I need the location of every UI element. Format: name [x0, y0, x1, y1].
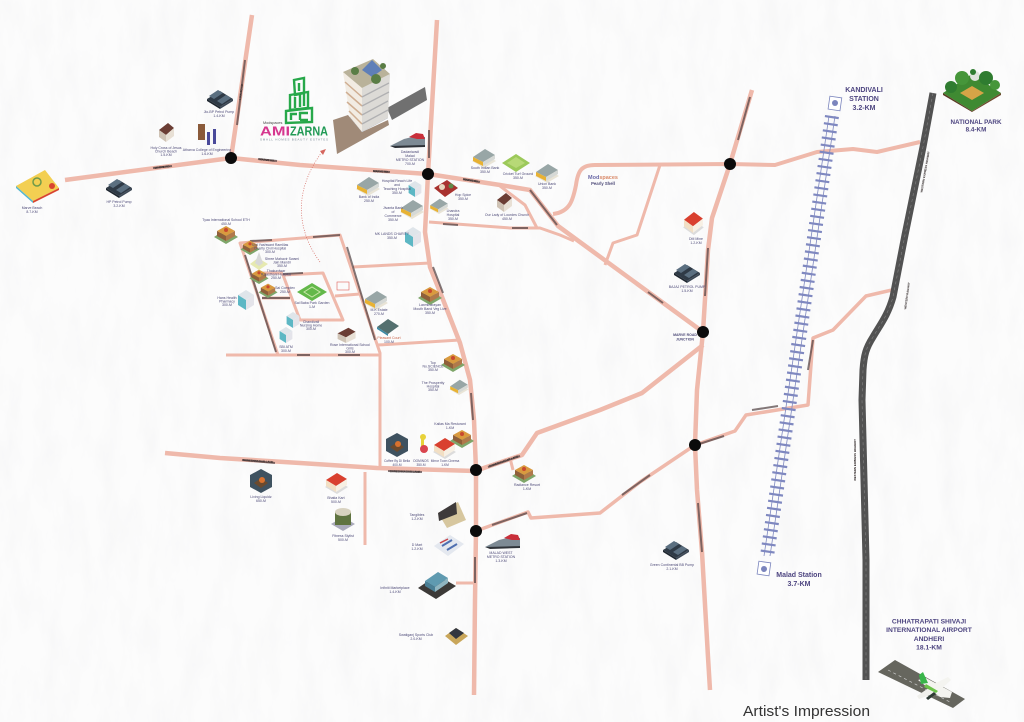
marker: Lhandra Hospital — [429, 199, 460, 221]
Malad station: Malad Station — [776, 572, 822, 579]
marker: Mirror Town Cinema: Mirror Town Cinema — [431, 459, 459, 463]
marker: Hans Health: Hans Health — [217, 296, 237, 300]
metro branch road — [476, 290, 892, 531]
road name markers: GANESHNAGAR LANE — [390, 469, 420, 474]
Airport: 18.1-KM — [916, 644, 942, 652]
marker: Malad metro station: 700-M — [405, 162, 415, 166]
marker: Jio-BP Petrol Pump: 1.4-KM — [213, 114, 225, 118]
marker: Green Continental pump: Green Continental BB Pump — [650, 563, 694, 567]
icon: green tower mark — [286, 78, 312, 123]
marker: Bhatia Kart: Bhatia Kart — [327, 496, 345, 500]
marker: Infiniti Marketplace: 1.4-KM — [389, 590, 401, 594]
marker: Prosperity Hospital — [422, 380, 469, 395]
marker: Holy Cross church: 1.5-KM — [160, 153, 172, 157]
northern link road — [231, 15, 252, 158]
marker: Bajaj Petrol Pump: 1.5-KM — [681, 289, 693, 293]
marker: Prosperity Hospital: Hospital — [427, 384, 440, 388]
logo: Amizarna: SMALL HOMES BEAUTY ESTATES — [260, 138, 328, 142]
western express highway: WESTERN RAILWAY — [903, 282, 911, 310]
Airport: ANDHERI — [914, 636, 944, 643]
National Park: NATIONAL PARK — [950, 119, 1002, 126]
marker: Our Lady of Lourdes Church: Our Lady of Lourdes Church — [485, 213, 529, 217]
marker: Kailas restaurant: Kailas Ma Resturant — [434, 422, 466, 426]
marker: Sai Baba Park Garden: 1-M — [309, 305, 315, 309]
marker: Malad West metro: MALAD WEST — [489, 551, 513, 555]
marker: Top — [422, 354, 465, 372]
marker: Rose International School — [330, 328, 370, 354]
marker: Atharva College: Atharva College of Engineering — [183, 148, 231, 152]
road name markers: GANESHNAGAR LANE — [243, 458, 274, 464]
project plot outline — [337, 282, 349, 290]
marker: Rose International School: 300-M — [345, 350, 355, 354]
marker: Hospital Reach Life: and — [394, 183, 400, 187]
marker: Jain temple: Shree Mahavir Swami — [265, 257, 299, 261]
marker: Mirror Town Cinema: 1-KM — [441, 463, 449, 467]
Airport — [878, 618, 973, 708]
eastern north south road — [695, 90, 752, 690]
western express highway: WESTERN EXPRESS HIGHWAY — [919, 151, 931, 193]
marker: Yashwant hospital — [240, 241, 289, 255]
marker: DM Mine — [683, 212, 704, 245]
marker: Atharva College: 1.6-KM — [201, 152, 213, 156]
marker: Dominos: DOMINOS — [413, 459, 429, 463]
logo: Amizarna: AMI — [260, 124, 290, 138]
marker: Hop Spice: 350-M — [458, 197, 468, 201]
marker: Prosperity Hospital: The Prosperity — [422, 381, 445, 385]
marker: Hop Spice: Hop Spice — [455, 193, 471, 197]
marker: Coffee By Di Bella — [384, 433, 410, 467]
Marve Road west and north — [65, 158, 703, 332]
marker: Chandivali Nursing Home: Chandivali — [303, 320, 319, 324]
marker: Hospital Reach Life — [382, 179, 421, 197]
label: Marve Road Junction — [673, 333, 697, 342]
marker: Jain temple — [250, 252, 299, 270]
marker: Living Liquidz: Living Liquidz — [250, 495, 272, 499]
marker: D Mart: D Mart — [412, 543, 422, 547]
marker: Thakur hospital: Thakurdwar — [267, 269, 286, 273]
marker: Swatiganj Sports Club: 2.0-KM — [410, 637, 422, 641]
project tower — [333, 59, 427, 154]
marker: Rose International School: Rose International School — [330, 343, 370, 347]
marker: Dominos: 350-M — [416, 463, 426, 467]
marker: estate: 270-M — [374, 312, 384, 316]
marker: Hospital Reach Life: Teaching Hospital — [383, 187, 411, 191]
marker: Lhandra Hospital: Lhandra — [447, 209, 459, 213]
west block roads — [240, 235, 380, 470]
Kandivali station: 3.2-KM — [853, 105, 876, 112]
marker: Pleasant Court: Pleasant Court — [377, 336, 401, 340]
marker: Yashwant hospital: 300-M — [265, 250, 275, 254]
marker: Living Liquidz: 650-M — [256, 499, 266, 503]
marker: Green Continental pump: 2.1-KM — [666, 567, 678, 571]
road name markers — [153, 60, 813, 583]
dotted route arrow — [301, 149, 326, 262]
marker: Lhandra Hospital: Hospital — [447, 213, 460, 217]
marker: Chandivali Nursing Home: 300-M — [306, 327, 316, 331]
marker: Yashwant hospital: Shri Yashwant Ramlilas — [252, 243, 289, 247]
marker: Pleasant Court — [377, 319, 401, 344]
western express highway — [853, 93, 933, 680]
junction markers — [225, 152, 736, 537]
Modspaces Pearly Shell — [588, 175, 618, 186]
marker: Lhandra Hospital: 350-M — [448, 217, 458, 221]
Pearly Shell to national park road — [553, 142, 920, 214]
marker: Hans Health: 300-M — [222, 303, 232, 307]
marker: Jio-BP Petrol Pump — [204, 90, 234, 118]
marker: Jain temple: Jain Mandir — [273, 260, 292, 264]
marker: Jain temple: 350-M — [277, 264, 287, 268]
National Park: 8.4-KM — [966, 126, 986, 134]
marker: Bajaj Petrol Pump — [669, 264, 706, 293]
marker: Our Lady of Lourdes Church — [485, 193, 529, 221]
marker: Hospital Reach Life: 350-M — [392, 191, 402, 195]
label: Marve Road Junction: MARVE ROAD — [673, 333, 697, 337]
marker: Yashwant hospital: Charity Civil Hospital — [254, 246, 286, 250]
marker: Marve Beach: 8.7-KM — [26, 210, 38, 214]
marker: Marve Beach: Marve Beach — [22, 206, 42, 210]
marker: HP Petrol Pump: HP Petrol Pump — [106, 200, 132, 204]
marker: South Indian Bank: 350-M — [480, 170, 490, 174]
marker: estate — [364, 291, 388, 316]
marker: SBI ATM: SBI ATM — [279, 345, 293, 349]
marker: Chandivali Nursing Home — [287, 312, 322, 331]
marker: Kailas restaurant: 1-KM — [446, 426, 454, 430]
Artist's Impression caption: Artist's Impression — [743, 703, 870, 720]
road name markers: GANESHNAGAR LANE — [489, 454, 519, 468]
National Park — [943, 69, 1002, 134]
marker: cricket turf: 350-M — [513, 176, 523, 180]
marker: Malad metro station: Dadaniwadi — [401, 150, 419, 154]
marker: international school — [202, 218, 250, 244]
road name markers: MARVE RD. — [463, 177, 479, 184]
marker: Swatiganj Sports Club — [399, 628, 468, 645]
marker: Union Bank: Union Bank — [538, 182, 556, 186]
marker: Malad metro station — [390, 133, 425, 166]
logo: Amizarna: ZARNA — [290, 124, 328, 138]
marker: Kailas restaurant — [434, 422, 474, 448]
marker: D Mart — [411, 535, 464, 556]
marker: Fitness Stylist: Fitness Stylist — [332, 534, 354, 538]
road name markers: MARVE RD. — [259, 157, 275, 163]
marker: Chandivali Nursing Home: Nursing Home — [300, 324, 322, 328]
marker: Laxminarayan: 350-M — [425, 311, 435, 315]
marker: Radiance Resort — [512, 465, 540, 491]
Modspaces Pearly Shell: Pearly Shell — [591, 181, 615, 186]
marker: Sai Complex: 250-M — [280, 290, 290, 294]
logo: Amizarna: Modspaces — [263, 121, 283, 125]
Airport: CHHATRAPATI SHIVAJI — [892, 618, 966, 626]
road name markers: LINK ROAD — [238, 84, 244, 100]
marker: Sai Complex: Sai Complex — [275, 286, 295, 290]
main north south road — [425, 20, 476, 695]
label: Marve Road Junction: JUNCTION — [676, 338, 694, 342]
marker: Radiance Resort: 1-KM — [523, 487, 531, 491]
marker: Sai Baba Park Garden — [294, 283, 330, 309]
icon: runway and plane — [878, 660, 965, 708]
road name markers: MARVE RD. — [154, 164, 171, 170]
marker: estate: M.K Estate — [370, 308, 388, 312]
Kandivali station — [828, 87, 883, 112]
marker: Holy Cross church — [150, 123, 182, 157]
marker: Prosperity Hospital: 350-M — [428, 388, 438, 392]
marker: Our Lady of Lourdes Church: 450-M — [502, 217, 512, 221]
logo: Amizarna — [260, 78, 328, 142]
marker: Fitness Stylist — [331, 508, 355, 542]
marker: MK Lands Charity: MK LANDS CHARITY — [375, 232, 410, 236]
marker: Malad metro station: METRO STATION — [396, 158, 425, 162]
marker: Tangibles: 1.2-KM — [411, 517, 423, 521]
marker: HP Petrol Pump — [106, 179, 132, 208]
Modspaces Pearly Shell: Modspaces — [588, 175, 618, 181]
marker: Holy Cross church: Holy Cross of Jesus — [150, 146, 182, 150]
marker: Radiance Resort: Radiance Resort — [514, 483, 540, 487]
marker: Hospital Reach Life: Hospital Reach Life — [382, 179, 412, 183]
marker: Coffee By Di Bella: Coffee By Di Bella — [384, 459, 410, 463]
marker: Atharva College — [183, 124, 231, 156]
road name markers: MARVE RD. — [373, 169, 389, 174]
marker: D Mart: 1.2-KM — [411, 547, 423, 551]
Malad station: 3.7-KM — [788, 581, 811, 588]
Ganesh Nagar Lane — [165, 345, 703, 471]
marker: Infiniti Marketplace: Infiniti Marketplace — [380, 586, 410, 590]
marker: Hans Health — [217, 290, 254, 310]
marker: Fitness Stylist: 500-M — [338, 538, 348, 542]
marker: South Indian Bank — [471, 149, 500, 174]
marker: Pleasant Court: 100-M — [384, 340, 394, 344]
marker: cricket turf — [502, 154, 533, 180]
marker: Jivanta Bank: 350-M — [388, 218, 398, 222]
marker: Top: No.SCIENCE — [422, 364, 444, 368]
marker: Dominos — [413, 434, 429, 467]
Malad station — [757, 561, 822, 588]
marker: Thakur hospital — [249, 269, 291, 284]
marker: Coffee By Di Bella: 400-M — [392, 463, 402, 467]
marker: Sai Complex — [258, 284, 295, 298]
marker: MK Lands Charity — [375, 227, 421, 247]
Airport: INTERNATIONAL AIRPORT — [886, 627, 973, 634]
marker: Living Liquidz — [250, 469, 272, 503]
western express highway: WESTERN EXPRESS HIGHWAY — [853, 439, 857, 481]
marker: Bank of India — [356, 177, 380, 203]
marker: Top: 350-M — [428, 368, 438, 372]
marker: international school: 450-M — [221, 222, 231, 226]
marker: Sai Baba Park Garden: Sai Baba Park Garden — [294, 301, 330, 305]
marker: Malad West metro — [485, 534, 520, 563]
marker: SBI ATM — [279, 327, 293, 353]
marker: Jivanta Bank: Commerce — [384, 214, 402, 218]
marker: Bank of India: 250-M — [364, 199, 374, 203]
marker: Jivanta Bank: Jivanta Bank — [383, 206, 403, 210]
marker: Marve Beach — [16, 170, 59, 214]
marker: Jio-BP Petrol Pump: Jio-BP Petrol Pump — [204, 110, 234, 114]
marker: HP Petrol Pump: 3.2-KM — [113, 204, 125, 208]
marker: Union Bank: 350-M — [542, 186, 552, 190]
marker: South Indian Bank: South Indian Bank — [471, 166, 500, 170]
marker: DM Mine: DM Mine — [689, 237, 703, 241]
Kandivali station: STATION — [849, 96, 879, 103]
marker: Laxminarayan — [413, 287, 447, 315]
marker: Green Continental pump — [650, 541, 694, 571]
marker: Laxminarayan: Mouth Band Veg Live — [413, 307, 447, 311]
marker: Bhatia Kart: 500-M — [331, 500, 341, 504]
marker: SBI ATM: 300-M — [281, 349, 291, 353]
road network — [65, 15, 920, 695]
marker: Bajaj Petrol Pump: BAJAJ PETROL PUMP — [669, 285, 706, 289]
marker: Bhatia Kart — [325, 473, 348, 504]
marker: Jivanta Bank: of — [392, 210, 394, 214]
marker: Malad West metro: 1.3-KM — [495, 559, 507, 563]
marker: cricket turf: Cricket Turf Ground — [503, 172, 533, 176]
marker: Thakur hospital: Rajasthani Hospital — [261, 272, 291, 276]
marker: Rose International School: Girls — [346, 346, 354, 350]
marker: Mirror Town Cinema — [431, 438, 459, 467]
marker: Hop Spice — [434, 180, 471, 201]
marker: Holy Cross church: Church Beach — [155, 150, 177, 154]
Kandivali station: KANDIVALI — [845, 87, 883, 94]
marker: Top: Top — [430, 361, 436, 365]
marker: Bank of India: Bank of India — [359, 195, 379, 199]
marker: international school: Tyaa International School ETH — [202, 218, 250, 222]
marker: Laxminarayan: Laxminarayan — [419, 303, 441, 307]
marker: Swatiganj Sports Club: Swatiganj Sports Club — [399, 633, 433, 637]
marker: Union Bank — [535, 164, 559, 190]
marker: Tangibles — [410, 502, 466, 528]
marker: MK Lands Charity: 350-M — [387, 236, 397, 240]
marker: Tangibles: Tangibles — [410, 513, 425, 517]
marker: Infiniti Marketplace — [380, 572, 456, 599]
marker: Malad West metro: METRO STATION — [487, 555, 516, 559]
marker: Thakur hospital: 250-M — [271, 276, 281, 280]
branch roads — [605, 165, 660, 265]
marker: DM Mine: 1.2-KM — [690, 241, 702, 245]
marker: Hans Health: Pharmacy — [219, 300, 235, 304]
marker: Malad metro station: Malad — [405, 154, 415, 158]
railway line — [764, 116, 835, 556]
marker: Jivanta Bank — [383, 200, 424, 222]
